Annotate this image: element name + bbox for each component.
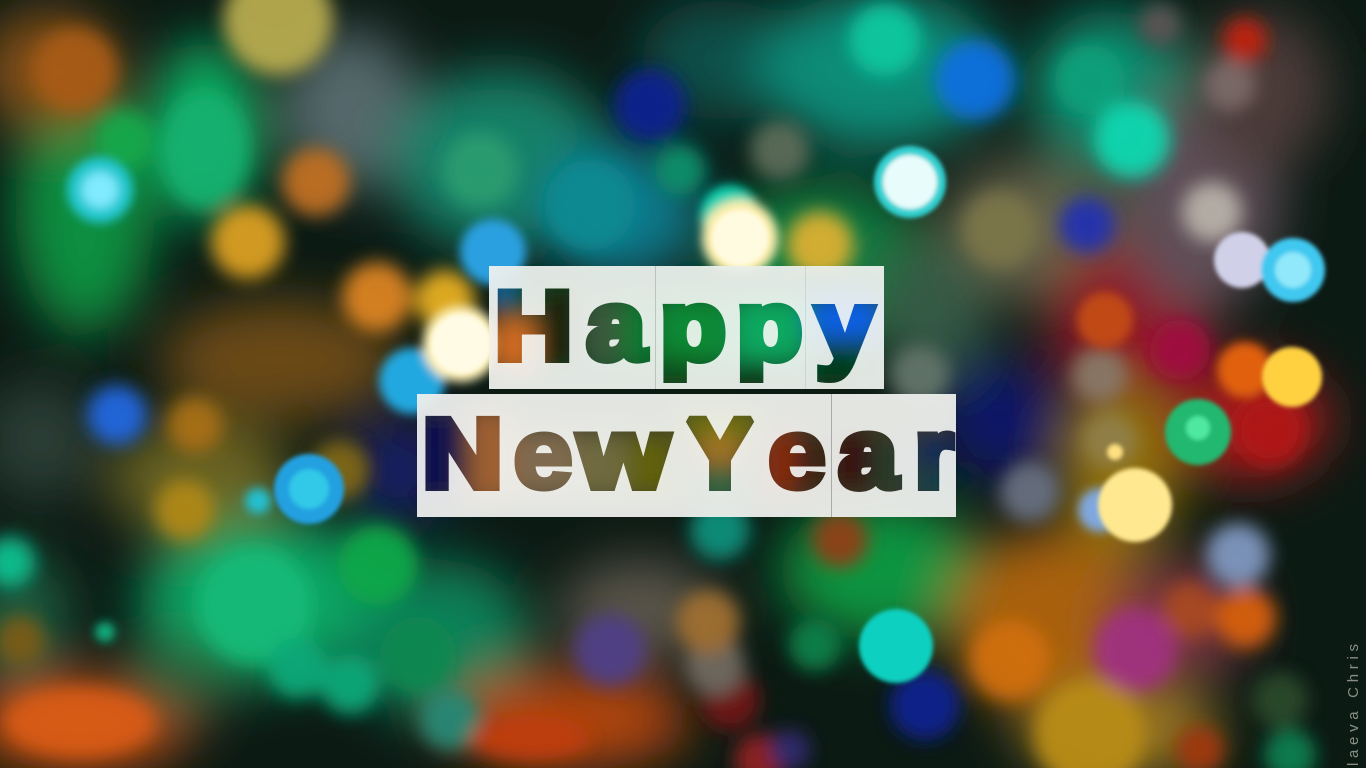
background: defined bokeh lights: [67, 157, 1273, 642]
background: colours showing through the letters: [417, 266, 956, 517]
heading: New Year (knocked out of white panel): [417, 394, 956, 517]
signature: laeva Chris: [1345, 644, 1362, 766]
background: crisp highlights: [274, 146, 1325, 683]
heading: Happy (knocked out of white panel): [489, 266, 884, 389]
